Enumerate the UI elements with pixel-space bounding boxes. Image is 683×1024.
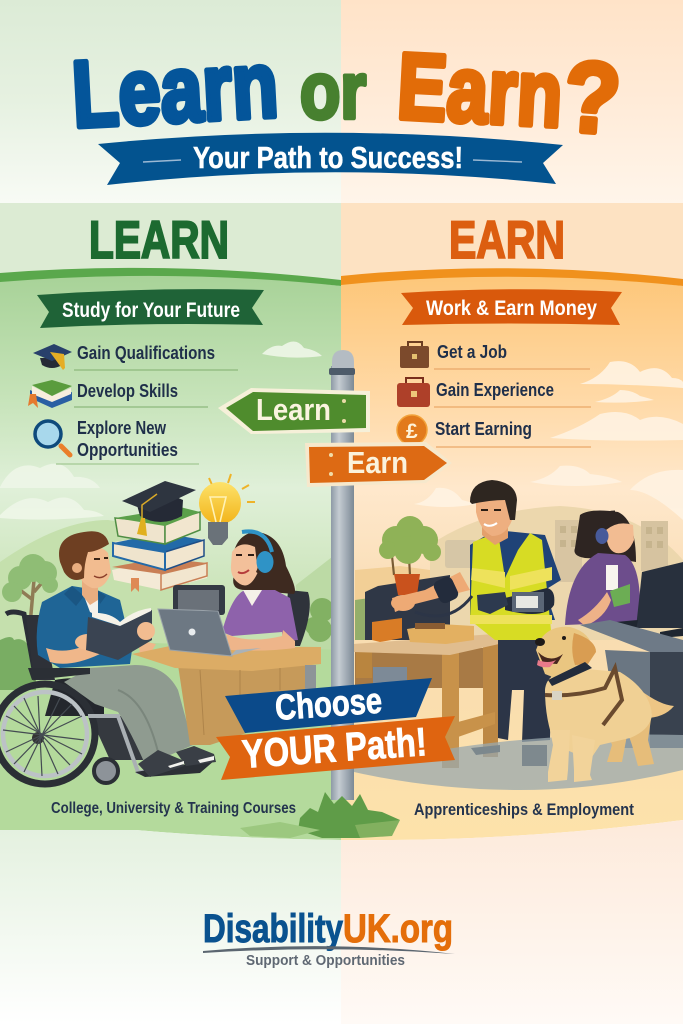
desk — [132, 646, 321, 745]
illustration: office worker at computer — [345, 511, 683, 790]
grass at pole base — [240, 792, 400, 838]
wheelchair backrest and handle — [6, 612, 150, 760]
wheel — [0, 684, 95, 784]
banner strip: YOUR Path: YOUR Path! — [241, 720, 428, 777]
list: earn benefits — [397, 342, 591, 447]
icon: light bulb — [199, 474, 255, 545]
item: gain experience — [397, 378, 591, 407]
icon: magnifying glass — [35, 421, 70, 455]
ribbon: your path to success — [98, 133, 563, 185]
ribbon: your path to success: Your Path to Success! — [193, 140, 463, 175]
armrest — [28, 668, 90, 680]
caption: college: College, University & Training Courses — [51, 800, 296, 817]
tree — [0, 554, 334, 690]
book: blue — [113, 533, 204, 570]
clouds: earn side — [414, 361, 683, 520]
graduation cap — [122, 481, 196, 536]
title word: Learn: Learn — [69, 31, 281, 147]
book: orange — [112, 558, 207, 592]
illustration: worker in high-vis vest — [391, 480, 561, 766]
harness — [545, 668, 622, 725]
item: explore new opportunities — [35, 418, 199, 464]
woman's hair — [232, 532, 295, 594]
laptop — [158, 609, 261, 656]
wheelchair frame and small wheel — [88, 706, 215, 783]
tail — [630, 690, 674, 718]
shoes — [138, 746, 216, 777]
sign: Earn: Earn — [347, 445, 408, 480]
collar — [548, 662, 592, 686]
shirt — [470, 530, 561, 620]
ground — [345, 734, 683, 790]
clouds: learn side — [0, 341, 322, 520]
item: gain experience: Gain Experience — [436, 380, 554, 400]
curved band: learn — [0, 268, 341, 286]
woman — [222, 531, 298, 651]
woman's face — [231, 544, 258, 586]
grey desk — [580, 620, 683, 748]
shirt — [37, 586, 132, 668]
title word: or: or — [300, 46, 366, 135]
prosthetic arm — [415, 588, 554, 616]
body — [545, 668, 652, 760]
caption: apprenticeships: Apprenticeships & Employment — [414, 801, 634, 819]
boxes — [372, 618, 474, 644]
logo word: UK.org: UK.org — [343, 907, 453, 951]
panel: earn — [341, 203, 683, 1024]
left arm — [392, 572, 470, 612]
item: start earning — [397, 415, 591, 447]
icon: pound coin — [397, 415, 427, 445]
machine behind bench — [365, 575, 450, 640]
sign: Earn — [305, 442, 452, 487]
sign: Learn: Learn — [256, 392, 331, 427]
curved band: earn — [341, 268, 683, 286]
rear legs — [605, 712, 654, 766]
logo word: Disability: Disability — [203, 907, 344, 951]
title mark: question: ? — [560, 40, 624, 156]
ribbon: study for your future — [37, 289, 264, 328]
item: gain qualifications: Gain Qualifications — [77, 343, 215, 363]
heading: EARN: EARN — [449, 211, 565, 270]
illustration: student in wheelchair — [0, 531, 216, 784]
item: explore new opportunities: Opportunities — [77, 440, 178, 460]
item: gain qualifications — [33, 343, 238, 370]
icon: pound coin: £ — [406, 420, 418, 443]
hills: learn side — [0, 520, 341, 830]
icon: brown briefcase — [400, 342, 429, 368]
tree in pot — [379, 516, 441, 595]
woman's top — [222, 590, 298, 641]
logo: DisabilityUK.org — [203, 907, 455, 969]
illustration: stack of books with graduation cap — [112, 481, 207, 592]
title — [69, 31, 624, 156]
pole — [331, 366, 354, 800]
woman's arm — [226, 630, 295, 651]
hi-vis vest — [470, 532, 552, 640]
book: green — [115, 507, 200, 544]
ribbon: work and earn money — [401, 289, 622, 325]
item: develop skills: Develop Skills — [77, 381, 178, 401]
item: explore new opportunities: Explore New — [77, 418, 167, 438]
trousers — [64, 665, 193, 764]
chair and monitor — [173, 585, 310, 646]
heading: LEARN: LEARN — [89, 211, 229, 270]
icon: book — [28, 380, 72, 408]
logo swoosh — [203, 946, 455, 954]
front legs — [548, 730, 595, 782]
trousers and shoes — [471, 640, 552, 766]
pole cap — [332, 350, 354, 372]
office worker — [565, 511, 640, 626]
signpost — [218, 350, 452, 800]
ribbon: work and earn money: Work & Earn Money — [426, 297, 597, 320]
monitor and keyboard — [605, 562, 683, 638]
item: get a job: Get a Job — [437, 342, 507, 362]
item: develop skills — [28, 380, 208, 408]
hills and city skyline — [355, 506, 683, 640]
workbench — [353, 633, 508, 768]
ribbon: study for your future: Study for Your Future — [62, 299, 240, 322]
item: get a job — [400, 342, 590, 369]
icon: red briefcase — [397, 378, 430, 407]
logo tagline: Support & Opportunities — [246, 953, 405, 969]
panel: learn — [0, 203, 341, 1024]
open book — [86, 608, 155, 660]
worker head — [470, 480, 517, 545]
title word: Earn: Earn — [395, 33, 565, 147]
sign: Learn — [218, 388, 370, 434]
banner strip: Choose — [225, 678, 432, 733]
background: header, right half — [341, 0, 683, 203]
illustration: workbench with tree and boxes — [353, 516, 508, 768]
banner: choose your path — [216, 678, 455, 780]
list: learn benefits — [28, 343, 238, 464]
icon: graduation cap — [33, 344, 72, 370]
head — [536, 627, 592, 680]
head and face — [59, 531, 111, 605]
illustration: desk with monitor and student at laptop — [132, 531, 321, 745]
background: header, left half — [0, 0, 341, 203]
headphones — [242, 531, 272, 552]
illustration: guide dog — [535, 627, 674, 782]
banner strip: Choose: Choose — [274, 680, 383, 728]
forearms and hands — [46, 634, 156, 664]
item: start earning: Start Earning — [435, 419, 532, 439]
